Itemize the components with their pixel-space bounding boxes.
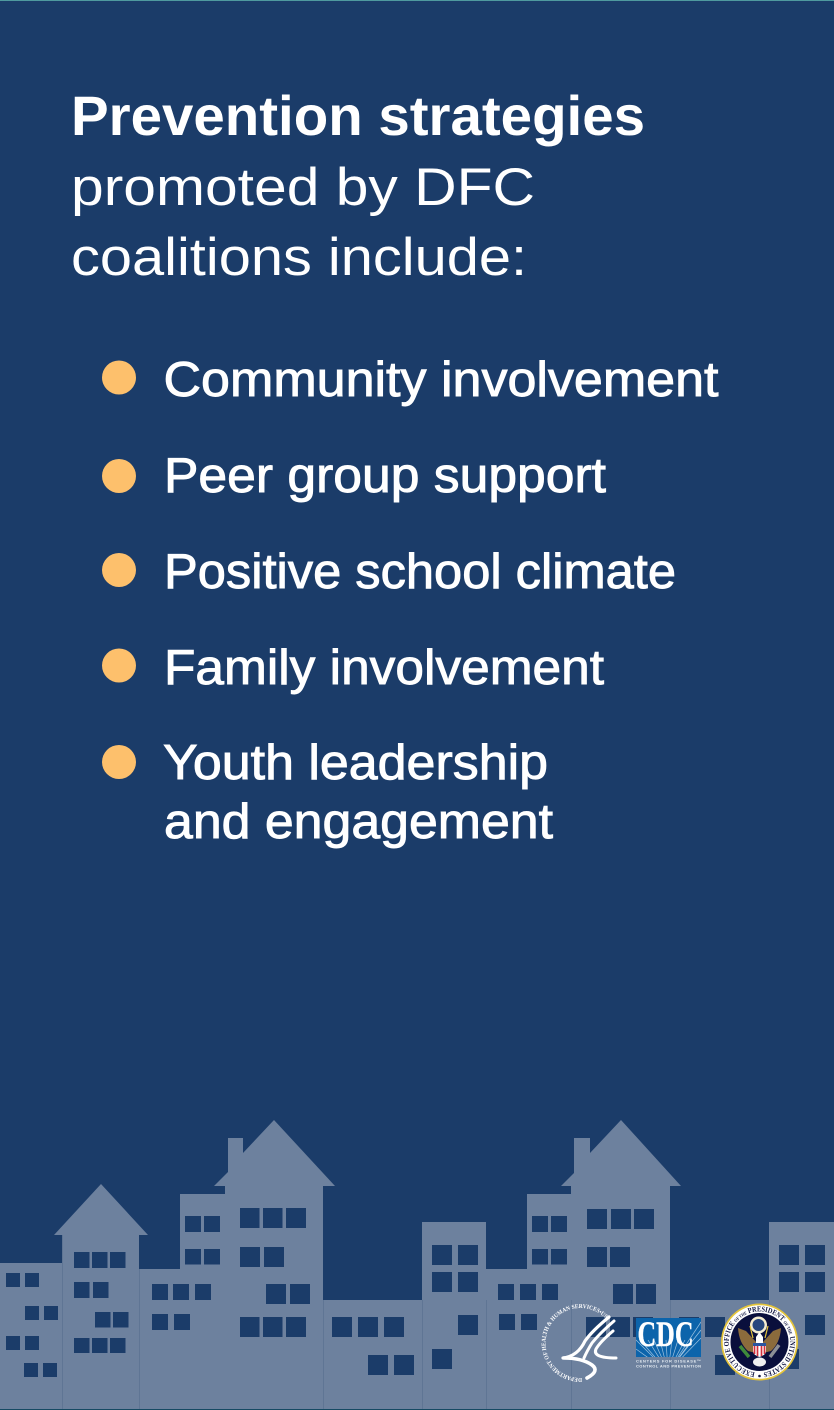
city skyline [0,1120,834,1410]
CDC caption [636,1358,701,1368]
eagle emblem [738,1316,781,1366]
heading [71,84,645,287]
list item: peer group support: Peer group support [164,449,606,503]
list item: community involvement: Community involvement [164,353,719,407]
CDC blue box [636,1318,701,1357]
HHS eagle [563,1317,616,1378]
seal star [758,1375,761,1377]
building edges [62,1235,770,1410]
CDC letters: CDC [638,1314,694,1354]
seal lettering: EXECUTIVE OFFICE OF THE PRESIDENT OF THE UNITED STATES [724,1306,796,1378]
heading: promoted by DFC [71,158,535,217]
windows [6,1208,825,1377]
HHS seal lettering: DEPARTMENT OF HEALTH & HUMAN SERVICES•USA [542,1304,608,1382]
list item: youth leadership and engagement [102,736,553,849]
list item: positive school climate: Positive school climate [164,545,676,599]
CDC caption: CENTERS FOR DISEASE™ [636,1358,701,1364]
heading: coalitions include: [71,228,527,287]
logo: Executive Office of the President seal [721,1304,798,1380]
logo: HHS [542,1304,618,1382]
top edge line [0,0,834,1]
strategy list [102,353,719,849]
heading: Prevention strategies [71,84,645,147]
list item: youth leadership and engagement: and engagement [164,795,553,849]
CDC caption: CONTROL AND PREVENTION [636,1364,701,1368]
building silhouettes [0,1120,834,1410]
list item: youth leadership and engagement: Youth leadership [163,736,548,790]
seal rings [721,1304,798,1380]
list item: family involvement: Family involvement [164,641,604,695]
logo: CDC [636,1318,701,1368]
bottom edge line [0,1409,834,1410]
CDC rays [636,1322,701,1357]
